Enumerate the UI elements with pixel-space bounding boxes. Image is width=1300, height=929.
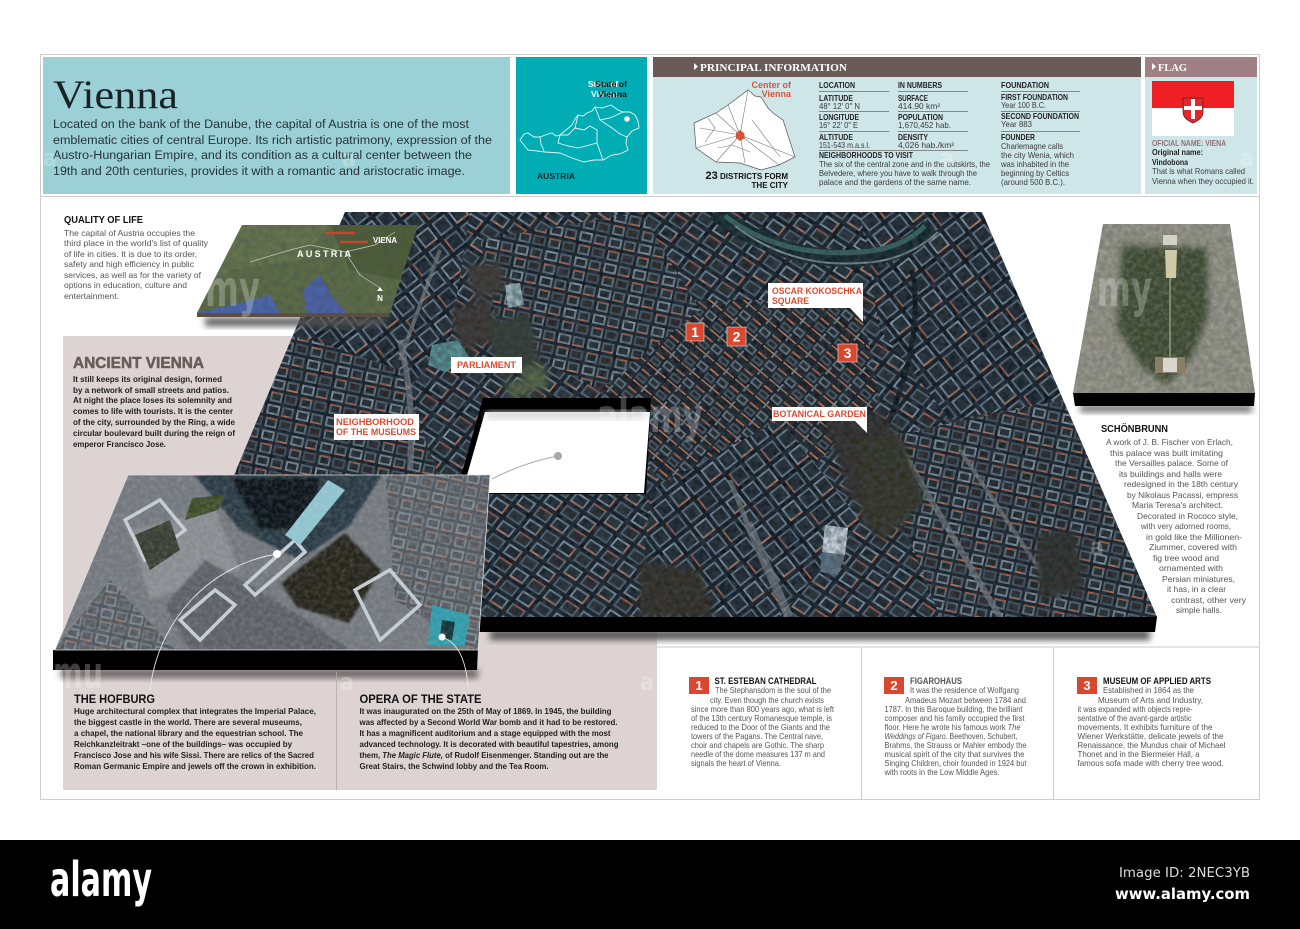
intro text: Austro-Hungarian Empire, and its condition as a cultural center between the [53,148,472,162]
panel: St. Esteban Cathedral: ST. ESTEBAN CATHEDRAL [714,676,817,686]
watermark: mu [53,648,103,699]
text: Schönbrunn: ornamented with [1159,563,1223,573]
panel: locator map of Austria [516,57,647,194]
icon: Vienna location [624,116,630,122]
label: State of Vienna: Vienna [591,89,619,99]
panel: Figarohaus: 1787. In this Baroque building, the brilliant [884,704,1023,714]
facts: location: 48° 12' 0" N [819,102,860,111]
facts: foundation: FOUNDER [1001,133,1035,142]
text: quality of life: The capital of Austria occupies the [64,228,195,238]
label: 23 districts: 23 DISTRICTS FORM [706,170,788,182]
label: Neighborhood of the Museums: NEIGHBORHOOD [336,416,414,427]
panel: Museum of Applied Arts: movements. It exhibits furniture of the [1078,722,1213,732]
label: Viena: VIENA [373,235,397,245]
watermark: my [1097,260,1152,318]
text: The Hofburg: a chapel, the national library and the equestrian school. The [74,729,303,738]
icon: north arrow [377,287,383,303]
text: The Hofburg: the biggest castle in the world. There are several museums, [74,718,302,727]
number badge 2 [884,677,904,694]
label: State of Vienna: Vienna [598,89,627,99]
facts: in numbers [898,81,954,150]
text: Schönbrunn [1101,422,1247,615]
facts: foundation: FIRST FOUNDATION [1001,93,1068,102]
intro text: Located on the bank of the Danube, the capital of Austria is one of the most [53,117,470,131]
text: Schönbrunn: Maria Teresa's architect. [1132,500,1223,510]
text: The Hofburg: Roman Germanic Empire and jewels off the crown in exhibition. [74,762,316,771]
panel: Figarohaus [884,676,1027,777]
footer image id: Image ID: 2NEC3YB [1119,866,1250,881]
label: Neighborhood of the Museums: OF THE MUSEUMS [336,426,416,437]
facts: location: 16° 22' 0" E [819,121,858,130]
facts: location: LOCATION [819,81,855,90]
footer url: www.alamy.com [1115,885,1250,903]
text: ancient Vienna [73,355,235,449]
heading bar: PRINCIPAL INFORMATION [700,62,847,74]
text: quality of life [64,214,209,301]
outer frame [40,54,1260,800]
intro text [53,117,492,178]
text: Opera of the State: was affected by a Second World War bomb and it had to be restored. [359,718,618,727]
map base thickness [400,617,1157,632]
flag text: Vindobona [1152,158,1188,167]
text: Schönbrunn: Ziummer, covered with [1149,542,1237,552]
text: ancient Vienna: ANCIENT VIENNA [73,355,204,372]
icon: north arrow: N [377,294,383,303]
watermark: a [342,144,356,172]
text: The Hofburg: Reichkanzleitrakt –one of the buildings– was occupied by [74,740,292,749]
facts: location: LONGITUDE [819,113,859,122]
panel: St. Esteban Cathedral: towers of the Pagans. The Central nave, [691,731,823,741]
text: The Hofburg: Francisco Jose and his wife Sissi. There are relics of the Sacred [74,751,314,760]
flag text [1152,139,1254,186]
label: Neighborhood of the Museums [334,414,419,440]
facts: foundation: the city Wenia, which [1001,151,1074,160]
label: Austria: AUSTRIA [297,249,352,259]
facts: neighborhoods to visit [819,151,990,187]
text: Opera of the State: Great Stairs, the Schwind lobby and the Tea Room. [360,762,548,771]
text: quality of life: third place in the world's list of quality [64,238,209,248]
marker 1 [686,323,704,341]
facts: location [819,81,870,150]
inset: Schönbrunn aerial [1070,220,1260,412]
watermark: a [640,668,654,696]
panel: Figarohaus: floor. Here he wrote his famous work The [884,722,1021,732]
marker 3: 3 [844,345,852,361]
text: quality of life: services, as well as for the variety of [64,270,202,280]
text: quality of life: of life in cities. It is due to its order, [64,249,197,259]
text: Schönbrunn: with very adorned rooms, [1140,521,1231,531]
watermark [43,144,1254,699]
text: Schönbrunn: the Versailles palace. Some of [1115,458,1229,468]
panel: ancient Vienna background [63,336,657,790]
facts: location: ALTITUDE [819,133,853,142]
facts: foundation: FOUNDATION [1001,81,1049,90]
panel: St. Esteban Cathedral: choir and chapels are Gothic. The sharp [691,740,824,750]
text: ancient Vienna: emperor Francisco Jose. [73,440,166,449]
facts: foundation: beginning by Celtics [1001,169,1069,178]
panel: Figarohaus: Brahms, the Strauss or Mahler embody the [884,740,1027,750]
footer logo: alamy [50,852,152,908]
panel: Figarohaus: FIGAROHAUS [910,676,962,686]
text: ancient Vienna: At night the place loses its solemnity and [73,396,232,405]
panel: Museum of Applied Arts [1077,676,1226,768]
bottom panel dividers [657,647,1260,800]
marker 3 [838,344,857,362]
watermark: a [1240,144,1254,172]
cut-out notch [462,398,651,494]
facts: foundation: was inhabited in the [1000,160,1069,169]
canal [715,212,930,258]
panel: Figarohaus: composer and his family occupied the first [884,713,1025,723]
panel: St. Esteban Cathedral: since more than 800 years ago, what is left [691,704,835,714]
facts: foundation: Charlemagne calls [1001,142,1063,151]
inset: Hofburg and Opera aerial [50,470,495,690]
panel: Figarohaus: It was the residence of Wolfgang [910,685,1019,695]
text: Opera of the State: It was inaugurated on the 25th of May of 1869. In 1945, the building [360,707,612,716]
text: quality of life: entertainment. [64,291,119,301]
watermark: a [1090,533,1104,561]
label: Parliament: PARLIAMENT [457,359,516,370]
panel: Figarohaus: musical spirit of the city that survives the [884,749,1025,759]
label: 23 districts [706,170,789,190]
text: Schönbrunn: by Nikolaus Pacassi, empress [1127,490,1238,500]
text: Opera of the State: advanced technology. It is decorated with beautiful tapestries, among [360,740,618,749]
flag text: Vienna when they occupied it. [1152,177,1254,186]
divider [336,672,338,790]
text: Opera of the State: them, The Magic Flute, of Rudolf Eisenmenger. Standing out are the [360,751,609,760]
text: Opera of the State: OPERA OF THE STATE [360,694,482,706]
panel: Museum of Applied Arts: Renaissance, the Mundus chair of Michael [1078,740,1226,750]
panel: intro header [43,57,510,194]
panel: Museum of Applied Arts: Museum of Arts and Industry, [1098,695,1203,705]
map shadow [490,630,1150,640]
panel: Museum of Applied Arts: MUSEUM OF APPLIED ARTS [1103,676,1211,686]
marker 1: 1 [691,324,699,340]
text: quality of life: safety and high efficiency in public [64,259,194,269]
facts: location: 151-543 m.a.s.l. [819,141,870,150]
text: ancient Vienna: It still keeps its original design, formed [73,375,222,384]
text: Opera of the State [359,694,618,771]
map outline Austria [520,105,639,162]
panel: Museum of Applied Arts: famous sofa made with cherry tree wood. [1078,758,1224,768]
building texture [386,476,490,650]
text: The Hofburg: THE HOFBURG [74,694,155,706]
label: State of Vienna: State of [595,79,627,89]
flag text: That is what Romans called [1152,167,1245,176]
facts: foundation [1000,81,1079,187]
number badge 1: 1 [695,678,703,693]
central old town [600,300,880,480]
callout dot: Hofburg inset link [492,452,562,479]
western blocks [235,212,470,473]
text: quality of life: options in education, culture and [64,280,187,290]
facts: location: LATITUDE [819,94,853,103]
streets [400,250,1060,617]
panel: Museum of Applied Arts: it was expanded with objects repre- [1078,704,1193,714]
panel: Museum of Applied Arts: Established in 1864 as the [1103,685,1194,695]
facts: in numbers: DENSITY [898,133,928,142]
facts: neighborhoods to visit: Belvedere, where you have to walk through the [819,169,977,178]
text: Opera of the State: It has a magnificent auditorium and a stage equipped with the most [360,729,611,738]
marker 2: 2 [733,328,741,344]
label: State of Vienna: State of [588,79,618,89]
text: Schönbrunn: this palace was built imitating [1110,448,1223,458]
number badge 1 [689,677,709,694]
intro text: emblematic cities of central Europe. Its rich artistic patrimony, expression of the [53,133,492,147]
panel: Figarohaus: Singing Children, choir founded in 1924 but [884,758,1027,768]
text: Schönbrunn: it has, in a clear [1167,584,1226,594]
text: Schönbrunn: fig tree wood and [1153,553,1219,563]
heading bar [653,57,1141,77]
main satellite map [170,212,1160,640]
facts: in numbers: IN NUMBERS [898,81,942,90]
facts: neighborhoods to visit: palace and the gardens of the same name. [819,178,971,187]
text: quality of life: QUALITY OF LIFE [64,214,143,226]
label: Botanical Garden: BOTANICAL GARDEN [773,408,866,419]
label: center of Vienna [751,80,792,99]
watermark: my [205,260,260,318]
facts: foundation: SECOND FOUNDATION [1001,112,1079,121]
intro text: 19th and 20th centuries, provides it with a romantic and aristocratic image. [53,164,465,178]
panel: St. Esteban Cathedral: needle of the dome measures 137 m and [691,749,825,759]
text: The Hofburg [74,694,316,771]
watermark: a [940,144,954,172]
panel: St. Esteban Cathedral: signals the heart of Vienna. [691,758,781,768]
facts: in numbers: 1,670,452 hab. [898,121,951,130]
text: Schönbrunn: A work of J. B. Fischer von Erlach, [1106,437,1233,447]
facts: foundation: (around 500 B.C.). [1001,178,1065,187]
heading bar: FLAG [1158,62,1187,74]
panel: Figarohaus: with roots in the Low Middle Ages. [884,767,1000,777]
panel: Museum of Applied Arts: sentative of the avant-garde artistic [1078,713,1192,723]
text: The Hofburg: Huge architectural complex that integrates the Imperial Palace, [74,707,316,716]
marker 2 [727,327,746,346]
facts: foundation: Year 883 [1001,120,1032,129]
panel: principal information [653,57,1141,194]
text: Schönbrunn: simple halls. [1176,605,1222,615]
callout line: Opera [438,634,468,687]
footer bar [0,840,1300,929]
panel: Figarohaus: Weddings of Figaro. Beethoven, Schubert, [884,731,1018,741]
text: Schönbrunn: Decorated in Rococo style, [1137,511,1238,521]
panel: St. Esteban Cathedral: city. Even though the church exists [710,695,824,705]
watermark: a [340,668,354,696]
number badge 3 [1077,677,1097,694]
panel: flag [1145,57,1257,194]
label: Botanical Garden [772,407,867,433]
facts: neighborhoods to visit: NEIGHBORHOODS TO VISIT [819,151,913,160]
inset: map of Austria [190,220,420,326]
callout line: Hofburg [150,550,281,690]
label: State of Vienna [588,79,627,99]
number badge 2: 2 [890,678,898,693]
concert hall roof [822,525,848,555]
panel: St. Esteban Cathedral: reduced to the Door of the Giants and the [691,722,830,732]
text: ancient Vienna: of the city, surrounded by the Ring, a wide [73,418,235,427]
icon: flag of Vienna [1152,81,1234,136]
label: center of Vienna: Center of [751,80,792,90]
label: Oscar Kokoschka Square: OSCAR KOKOSCHKA [772,285,862,296]
title: Vienna [53,72,178,117]
parliament building [428,340,470,372]
text: Schönbrunn: its buildings and halls were [1119,469,1222,479]
flag text: OFICIAL NAME: VIENA [1152,139,1226,148]
facts: in numbers: POPULATION [898,113,943,122]
text: ancient Vienna: comes to life with tourists. It is the center [73,407,234,416]
text: ancient Vienna: circular boulevard built during the reign of [73,429,235,438]
label: Austria: AUSTRIA [537,171,575,181]
text: Schönbrunn: in gold like the Millionen- [1146,532,1242,542]
facts: foundation: Year 100 B.C. [1001,101,1046,110]
text: ancient Vienna: by a network of small streets and patios. [73,386,229,395]
label: Oscar Kokoschka Square: SQUARE [772,295,809,306]
facts: in numbers: 414.90 km² [898,102,940,111]
map of districts [694,80,795,190]
label: Parliament [451,357,522,373]
facts: in numbers: SURFACE [898,94,928,103]
facts: in numbers: 4,026 hab./km² [898,141,954,150]
text: Schönbrunn: contrast, other very [1171,595,1247,605]
label: 23 districts: THE CITY [752,181,789,190]
parks [450,262,1085,617]
watermark: a [43,144,57,172]
text: Schönbrunn: SCHÖNBRUNN [1101,422,1168,435]
label: Oscar Kokoschka Square [768,283,863,322]
panel: Figarohaus: Amadeus Mozart between 1784 and [905,695,1026,705]
panel: Museum of Applied Arts: Wiener Werkstätte, delicate jewels of the [1078,731,1224,741]
panel: St. Esteban Cathedral [689,676,835,768]
watermark: alamy [597,389,703,443]
panel: St. Esteban Cathedral: The Stephansdom is the soul of the [715,685,831,695]
text: Schönbrunn: Persian miniatures, [1162,574,1235,584]
panel: Museum of Applied Arts: Thonet and in the Biermeier Hall, a [1078,749,1200,759]
label: center of Vienna: Vienna [762,89,792,99]
text: Schönbrunn: redesigned in the 18th century [1124,479,1239,489]
facts: neighborhoods to visit: The six of the central zone and in the outskirts, the [819,160,990,169]
icon: center of Vienna [736,130,745,141]
panel: St. Esteban Cathedral: of the 13th century Romanesque temple, is [691,713,832,723]
number badge 3: 3 [1083,678,1091,693]
flag text: Original name: [1152,148,1203,157]
